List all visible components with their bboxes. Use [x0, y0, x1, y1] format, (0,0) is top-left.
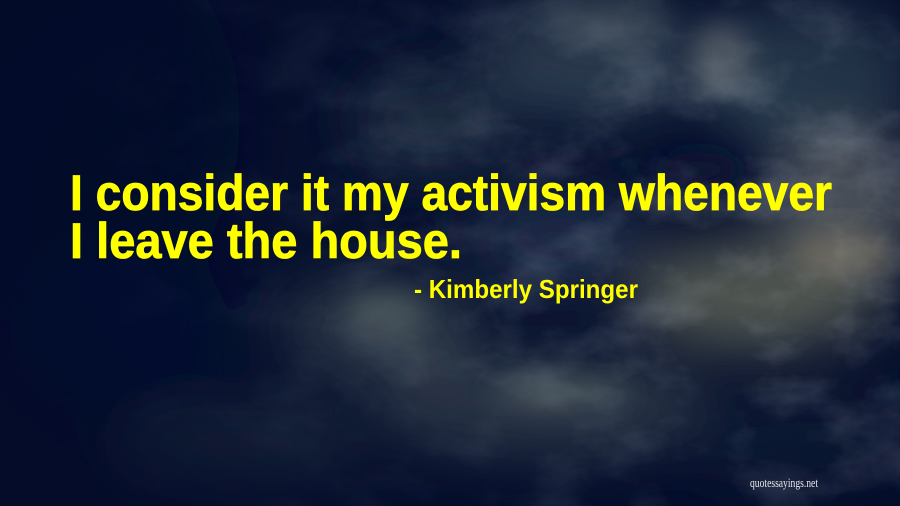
quote line 2: I leave the house.	[70, 213, 462, 269]
watermark: quotessayings.net	[750, 476, 818, 490]
quote text	[70, 165, 832, 269]
quote line 1: I consider it my activism whenever	[70, 165, 832, 221]
attribution: - Kimberly Springer	[414, 274, 638, 304]
